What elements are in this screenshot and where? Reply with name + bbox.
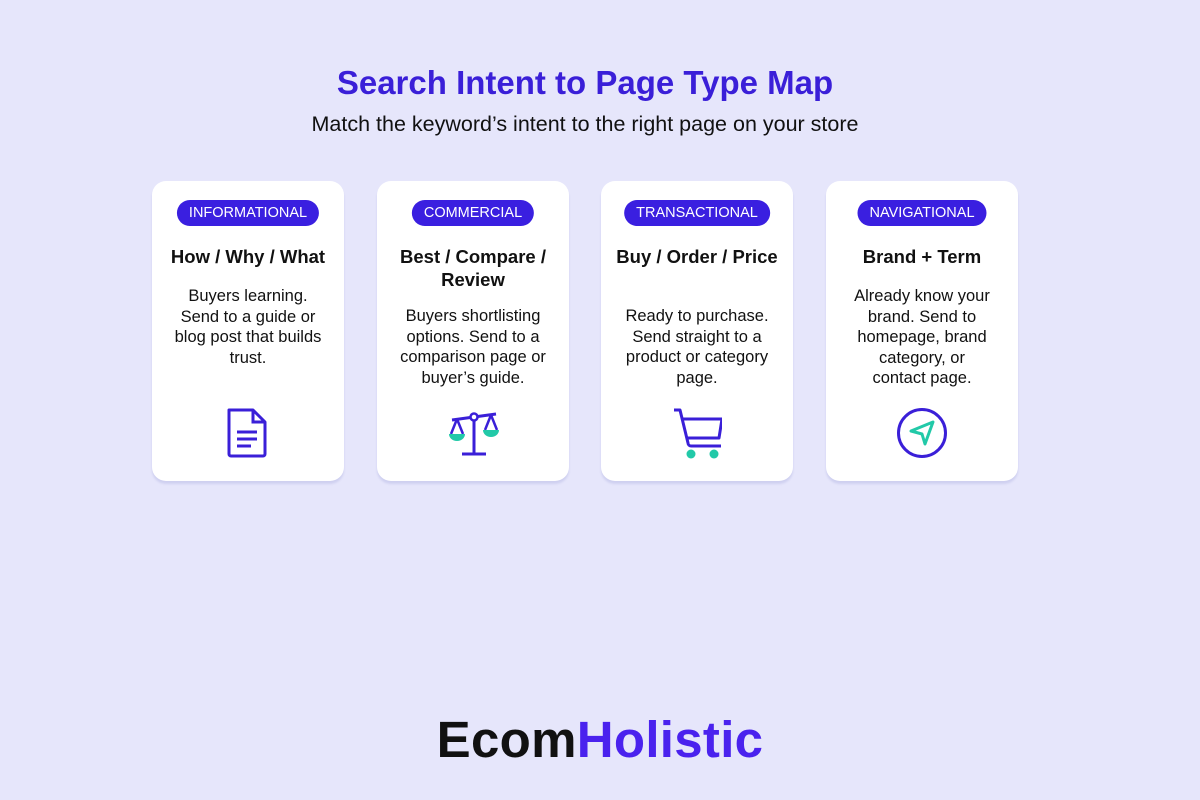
panel: navigational — [826, 181, 1018, 481]
panel: informational — [152, 181, 344, 481]
heading: Review — [441, 269, 505, 290]
heading: How / Why / What — [171, 246, 325, 267]
pill: transactional — [624, 200, 770, 226]
icon: cart — [674, 408, 722, 458]
text: comparison page or — [400, 348, 546, 366]
text: Buyers shortlisting — [406, 307, 540, 325]
text — [175, 287, 321, 366]
pill: navigational — [857, 200, 987, 226]
pill: transactional: TRANSACTIONAL — [636, 205, 758, 221]
pill: informational: INFORMATIONAL — [189, 205, 307, 221]
subtitle: Match the keyword’s intent to the right page on your store — [312, 112, 858, 136]
text: category, or — [879, 348, 965, 366]
panel: commercial — [377, 181, 569, 481]
heading: Buy / Order / Price — [616, 246, 778, 267]
text — [400, 307, 546, 386]
text: Buyers learning. — [188, 287, 308, 305]
text: Already know your — [854, 287, 990, 305]
pill: informational — [177, 200, 319, 226]
logo: EcomHolistic — [437, 711, 763, 768]
text: contact page. — [872, 369, 972, 387]
pill: commercial — [412, 200, 534, 226]
text — [854, 287, 990, 387]
text: Send straight to a — [632, 328, 762, 346]
text: page. — [676, 368, 718, 386]
text: trust. — [230, 348, 266, 366]
text: product or category — [626, 348, 768, 366]
icon: navigation arrow — [897, 408, 947, 458]
text: blog post that builds — [175, 328, 321, 346]
text: Send to a guide or — [181, 308, 315, 326]
title: Search Intent to Page Type Map — [337, 64, 833, 101]
text: brand. Send to — [868, 308, 976, 326]
text — [625, 307, 769, 386]
pill: commercial: COMMERCIAL — [424, 205, 522, 221]
text: Ready to purchase. — [625, 307, 769, 325]
heading — [400, 246, 546, 290]
icon: scales — [449, 412, 499, 456]
pill: navigational: NAVIGATIONAL — [869, 205, 975, 221]
icon: document — [228, 408, 266, 458]
panel: transactional — [601, 181, 793, 481]
text: options. Send to a — [406, 328, 540, 346]
heading: Best / Compare / — [400, 246, 546, 267]
text: homepage, brand — [857, 328, 987, 346]
heading: Brand + Term — [863, 246, 981, 267]
text: buyer’s guide. — [421, 368, 525, 386]
